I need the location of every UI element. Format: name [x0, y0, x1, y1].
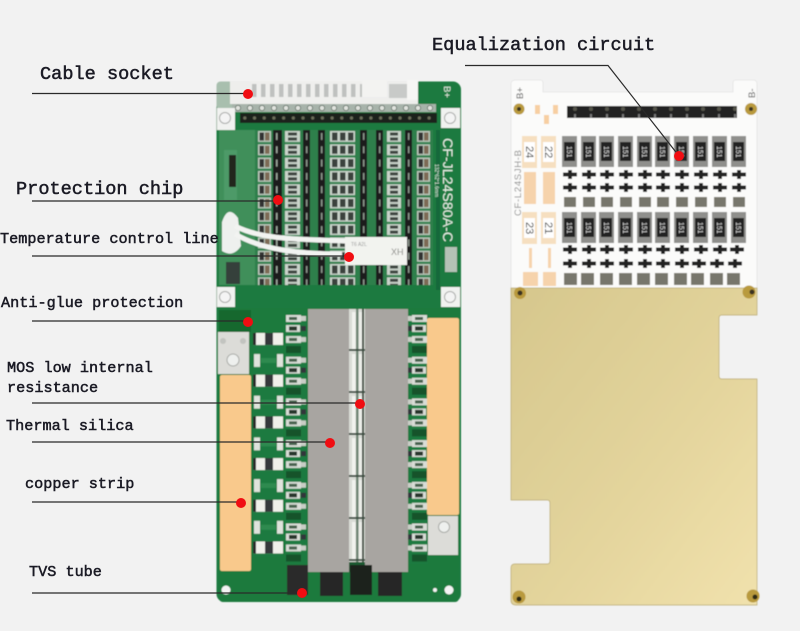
- resistor values lower row: 151: [565, 222, 572, 234]
- leader line: [32, 402, 360, 404]
- anti-glue patch: [219, 310, 251, 332]
- resistor values upper row: 151: [565, 146, 572, 158]
- label: Anti-glue protection: [1, 294, 183, 312]
- resistor values lower row: 151: [584, 222, 591, 234]
- label: MOS low internal: [7, 359, 153, 377]
- silkscreen size text: 132*62*1.6mm: [433, 164, 439, 197]
- resistor values lower row: 151: [621, 222, 628, 234]
- numbered parts 24 22 23 21: [522, 136, 556, 244]
- leader line: [465, 66, 679, 156]
- resistor values lower row: 151: [734, 222, 741, 234]
- transistors and small parts: [563, 170, 746, 268]
- resistor values upper row: 151: [677, 146, 684, 158]
- silkscreen model text: CF-L24SJH-B: [513, 150, 524, 216]
- resistor values lower row: 151: [715, 222, 722, 234]
- resistor values upper row: 151: [621, 146, 628, 158]
- callout: Thermal silica: [6, 417, 335, 448]
- red marker: [344, 252, 354, 262]
- small copper pads: [523, 172, 556, 286]
- top copper pads: [535, 105, 558, 124]
- temperature relay: XH: [391, 247, 404, 257]
- copper strip left: [220, 375, 251, 571]
- lower power section base: [219, 308, 459, 602]
- label: copper strip: [25, 475, 134, 493]
- panel: PCB front view: [216, 80, 461, 602]
- red marker: [355, 399, 365, 409]
- leader line: [32, 441, 330, 443]
- mounting pads: [217, 108, 460, 307]
- thermal silica right: [365, 309, 408, 572]
- silver pad bottom-right: [428, 516, 458, 555]
- leader line: [32, 200, 278, 202]
- callout: Equalization circuit: [432, 35, 684, 161]
- mounting holes: [222, 586, 454, 594]
- resistor values lower row: 151: [658, 222, 665, 234]
- center MOS strip: [349, 309, 365, 562]
- leader line: [32, 255, 349, 257]
- numbered parts 24 22 23 21: 21: [542, 222, 554, 234]
- left power resistors: [253, 333, 283, 557]
- silkscreen B+: B+: [441, 86, 452, 98]
- silver pad top-left: [218, 332, 249, 374]
- callout: Protection chip: [16, 179, 283, 205]
- leader line: [32, 320, 248, 322]
- resistor values lower row: 151: [602, 222, 609, 234]
- resistor values lower row: 151: [677, 222, 684, 234]
- red marker: [243, 317, 253, 327]
- label: Protection chip: [16, 179, 183, 200]
- leader line: [32, 501, 241, 503]
- silkscreen B+: B+: [515, 87, 526, 99]
- callout: MOS low internal resistance: [7, 359, 365, 409]
- temperature relay: [345, 237, 407, 265]
- thermal indicator pad: [445, 247, 457, 272]
- resistor values upper row: 151: [640, 146, 647, 158]
- label: Thermal silica: [6, 417, 134, 435]
- resistor values lower row: [565, 222, 741, 234]
- white board: [511, 80, 757, 292]
- red marker: [297, 588, 307, 598]
- callout: copper strip: [25, 475, 246, 508]
- resistor values upper row: 151: [584, 146, 591, 158]
- red marker: [273, 195, 283, 205]
- silkscreen model text: CF-JL24S80A-C: [440, 138, 456, 242]
- component grid: [255, 130, 433, 285]
- red marker: [243, 89, 253, 99]
- thermal silica left: [308, 309, 349, 572]
- label: Equalization circuit: [432, 35, 655, 56]
- resistor values lower row: 151: [640, 222, 647, 234]
- brass posts: [512, 103, 760, 604]
- numbered parts 24 22 23 21: 23: [523, 222, 535, 234]
- resistor values upper row: 151: [658, 146, 665, 158]
- small resistors rows: [564, 197, 745, 285]
- cable socket: [230, 80, 436, 112]
- red marker: [674, 151, 684, 161]
- left MOS gate column: [285, 314, 307, 564]
- label: Cable socket: [40, 64, 174, 85]
- label: TVS tube: [29, 563, 102, 581]
- callout: Temperature control line: [0, 230, 354, 262]
- red marker: [236, 498, 246, 508]
- resistor values upper row: 151: [715, 146, 722, 158]
- copper strip right: [427, 318, 459, 515]
- board base: [216, 82, 461, 602]
- balance resistors lower row: [562, 212, 746, 243]
- resistor values upper row: 151: [696, 146, 703, 158]
- numbered parts 24 22 23 21: 24: [523, 146, 535, 158]
- header strip: [240, 113, 437, 123]
- numbered parts 24 22 23 21: 22: [542, 146, 554, 158]
- balance resistors upper row: [562, 136, 746, 167]
- resistor values lower row: 151: [696, 222, 703, 234]
- gold heat plate: [511, 288, 757, 605]
- temperature sensor wires: [222, 212, 346, 254]
- label second line: resistance: [7, 379, 98, 397]
- callout: TVS tube: [29, 563, 307, 598]
- resistor values upper row: 151: [602, 146, 609, 158]
- callout: Cable socket: [32, 64, 253, 99]
- TVS tubes: [287, 565, 402, 596]
- red marker: [325, 438, 335, 448]
- leader line: [32, 92, 248, 94]
- resistor values upper row: 151: [734, 146, 741, 158]
- silkscreen B-: B-: [747, 88, 758, 98]
- panel: PCB back view: [511, 80, 760, 605]
- temperature relay: T6 A2L: [351, 242, 367, 248]
- resistor values upper row: [565, 146, 741, 158]
- leader line: [32, 592, 302, 594]
- pin header: [567, 106, 737, 118]
- label: Temperature control line: [0, 230, 219, 248]
- right MOS gate column: [407, 314, 428, 564]
- callout: Anti-glue protection: [1, 294, 253, 327]
